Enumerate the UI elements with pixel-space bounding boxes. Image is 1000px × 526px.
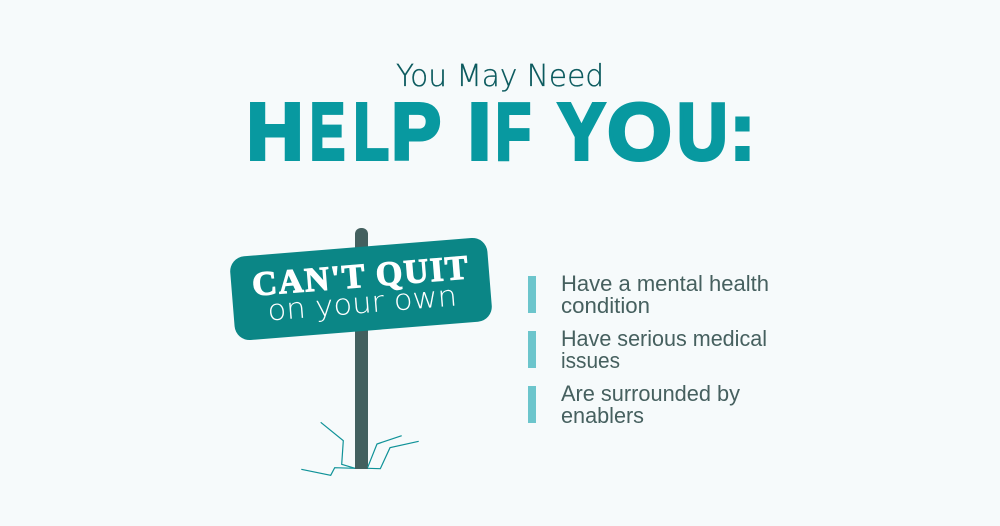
title: E	[310, 87, 345, 176]
title: U	[677, 87, 727, 176]
item 2: Have serious medical	[561, 326, 767, 351]
title: P	[392, 87, 441, 176]
title	[247, 87, 755, 176]
title: H	[247, 87, 303, 176]
subtitle: You May Need	[396, 59, 604, 94]
title: L	[354, 87, 389, 176]
signpost	[229, 228, 493, 475]
sign board	[229, 237, 493, 341]
item 3: enablers	[561, 403, 644, 428]
title: F	[496, 87, 531, 176]
title: Y	[558, 87, 605, 176]
item 2: issues	[561, 348, 620, 373]
list	[528, 271, 769, 428]
title: O	[608, 87, 672, 176]
item 1: Have a mental health	[561, 271, 769, 296]
sign text: on your own: on your own	[266, 278, 458, 328]
title: :	[730, 87, 755, 176]
post	[355, 228, 368, 469]
item 3: Are surrounded by	[561, 381, 740, 406]
item 1: condition	[561, 293, 650, 318]
item 1	[528, 271, 769, 318]
title: I	[468, 87, 491, 176]
ground cracks	[301, 422, 419, 475]
item 3	[528, 381, 740, 428]
item 2	[528, 326, 767, 373]
sign text: can't quit: CAN'T QUIT	[251, 249, 469, 304]
